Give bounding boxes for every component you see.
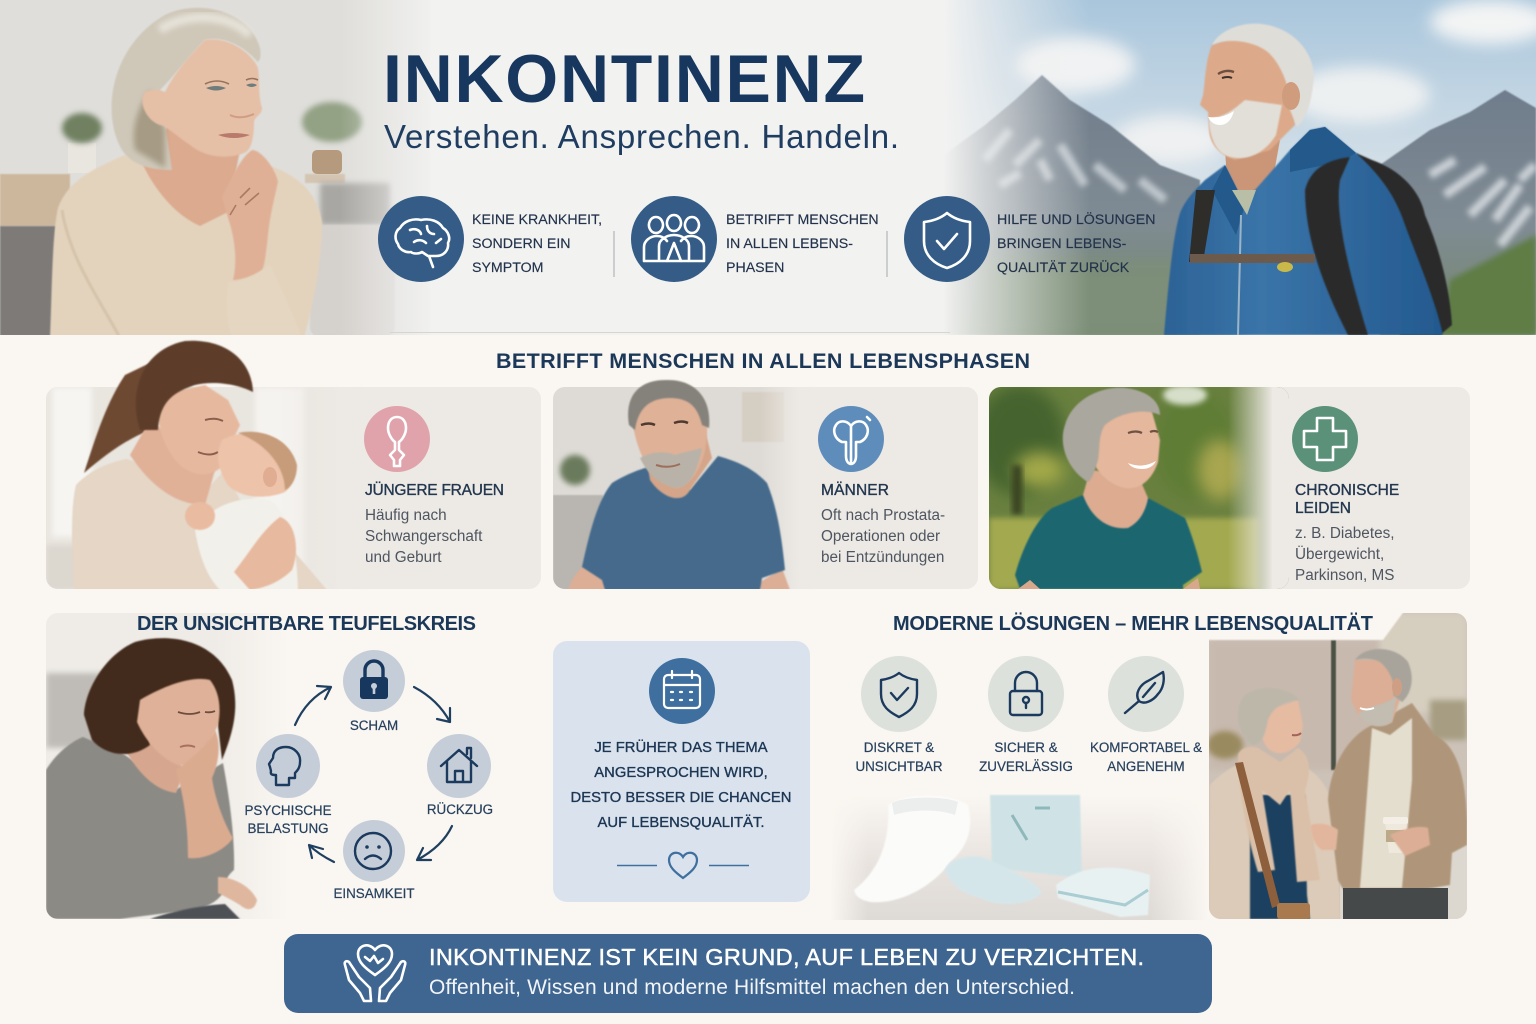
arrow: withdrawal to loneliness (417, 826, 452, 860)
arrow: strain to shame (295, 686, 331, 725)
heading: life phases: BETRIFFT MENSCHEN IN ALLEN LEBENSPHASEN (496, 349, 1030, 373)
text: chronic conditions: CHRONISCHE (1295, 482, 1399, 499)
solution: comfortable: ANGENEHM (1107, 759, 1185, 774)
text: betrifft Menschen: IN ALLEN LEBENS- (726, 236, 853, 252)
title: INKONTINENZ (383, 41, 865, 117)
panel: chronic conditions: z. B. Diabetes, (1295, 525, 1394, 542)
panel: men: Oft nach Prostata- (821, 507, 945, 524)
node: withdrawal (427, 734, 493, 817)
text: early conversation: ANGESPROCHEN WIRD, (594, 765, 768, 781)
solution: safe: ZUVERLÄSSIG (979, 759, 1073, 774)
photo: products (830, 795, 1208, 920)
banner: closing message: Offenheit, Wissen und moderne Hilfsmittel machen den Unterschied. (429, 976, 1075, 999)
hand (222, 150, 278, 280)
man shirt (1360, 718, 1412, 888)
hair (112, 8, 261, 170)
text: keine Krankheit: KEINE KRANKHEIT, (472, 212, 602, 228)
man jacket (1328, 703, 1467, 902)
panel: younger women: Schwangerschaft (365, 528, 483, 545)
woman head (1260, 700, 1303, 753)
node: psychological strain: PSYCHISCHE (244, 803, 332, 818)
sweater (50, 155, 322, 338)
photo: woman in living room (0, 0, 440, 338)
node: loneliness: EINSAMKEIT (333, 886, 415, 901)
face (137, 679, 220, 765)
subtitle: Verstehen. Ansprechen. Handeln. (384, 118, 899, 155)
chest and neck (143, 125, 240, 226)
text: betrifft Menschen: BETRIFFT MENSCHEN (726, 212, 879, 228)
icon: male anatomy (818, 406, 884, 472)
solution: discreet: UNSICHTBAR (855, 759, 943, 774)
icon: people (631, 196, 717, 282)
photo: couple in the city (1205, 610, 1467, 920)
neck (130, 420, 215, 505)
node: shame (343, 650, 405, 733)
panel: modern solutions (830, 612, 1373, 920)
sleeve (227, 264, 302, 338)
node: psychological strain (244, 734, 332, 836)
panel: younger women: und Geburt (365, 549, 442, 566)
hair (136, 341, 253, 430)
node: withdrawal: RÜCKZUG (427, 802, 493, 817)
panel: men: Operationen oder (821, 528, 940, 545)
node: loneliness (333, 820, 415, 901)
panel: chronic conditions (975, 385, 1470, 590)
panel: men: bei Entzündungen (821, 549, 944, 566)
header banner with photos (0, 0, 1536, 338)
solution: comfortable: KOMFORTABEL & (1090, 740, 1202, 755)
photo: mother and baby (46, 340, 326, 589)
text: younger women: JÜNGERE FRAUEN (365, 481, 504, 499)
panel: chronic conditions: Parkinson, MS (1295, 567, 1394, 584)
photo: man in t-shirt (553, 379, 790, 589)
text: early conversation: DESTO BESSER DIE CHANCEN (571, 790, 791, 806)
text: men: MÄNNER (821, 482, 889, 499)
solution: discreet (855, 656, 943, 774)
hair (84, 638, 235, 760)
icon: female anatomy (364, 406, 430, 472)
arrow: shame to withdrawal (414, 687, 450, 722)
face (142, 39, 262, 157)
baby (195, 499, 298, 590)
body (72, 459, 327, 590)
text: keine Krankheit: SYMPTOM (472, 260, 543, 276)
panel: men (553, 380, 978, 590)
scarf (1238, 747, 1320, 882)
node: shame: SCHAM (350, 718, 398, 733)
panel: younger women: Häufig nach (365, 507, 447, 524)
solution: discreet: DISKRET & (864, 740, 934, 755)
ponytail (84, 362, 152, 473)
icon: medical cross (1292, 406, 1358, 472)
arrow: loneliness to strain (309, 845, 334, 862)
text: early conversation: AUF LEBENSQUALITÄT. (598, 814, 764, 831)
text: chronic conditions: LEIDEN (1295, 500, 1351, 517)
panel: vicious circle (46, 613, 493, 919)
icon: calendar (649, 658, 715, 724)
woman coat (1209, 762, 1340, 919)
key fact: all life phases (631, 196, 879, 282)
icon: heart (617, 853, 749, 878)
lower hand (218, 877, 257, 909)
icon: shield (904, 196, 990, 282)
text: Hilfe und Lösungen: QUALITÄT ZURÜCK (997, 258, 1130, 276)
banner: closing message (284, 934, 1212, 1013)
heading: modern solutions: MODERNE LÖSUNGEN – MEHR LEBENSQUALITÄT (893, 612, 1373, 635)
coffee cup (1386, 824, 1406, 853)
icon: hands and heart (345, 945, 405, 1001)
page-coloured corner above the photo (1205, 610, 1405, 640)
photo: thoughtful woman (46, 613, 258, 919)
text: betrifft Menschen: PHASEN (726, 260, 784, 276)
man head (1351, 660, 1400, 725)
text: closing message: INKONTINENZ IST KEIN GRUND, AUF LEBEN ZU VERZICHTEN. (429, 944, 1144, 970)
solution: safe: SICHER & (994, 740, 1058, 755)
hand (234, 517, 296, 590)
icon: brain (378, 196, 464, 282)
text: keine Krankheit: SONDERN EIN (472, 236, 571, 252)
text: early conversation: JE FRÜHER DAS THEMA (594, 738, 768, 756)
text: Hilfe und Lösungen: HILFE UND LÖSUNGEN (997, 210, 1155, 228)
solution: comfortable (1090, 656, 1202, 774)
neck (126, 741, 182, 794)
panel: younger women (46, 341, 541, 590)
supporting hand (176, 730, 233, 858)
photo: hiker man (1164, 24, 1452, 335)
face (157, 385, 240, 474)
node: psychological strain: BELASTUNG (247, 821, 329, 836)
hands (1390, 827, 1430, 856)
photo: mountains (952, 0, 1536, 335)
sweater (46, 737, 234, 919)
panel: chronic conditions: Übergewicht, (1295, 545, 1384, 563)
key fact: help and solutions (904, 196, 1155, 282)
callout: early conversation (553, 641, 810, 902)
photo: woman in park (975, 385, 1292, 590)
solution: safe (979, 656, 1073, 774)
key fact: symptom (378, 196, 602, 282)
text: Hilfe und Lösungen: BRINGEN LEBENS- (997, 236, 1127, 252)
heading: vicious circle: DER UNSICHTBARE TEUFELSKREIS (137, 613, 476, 635)
